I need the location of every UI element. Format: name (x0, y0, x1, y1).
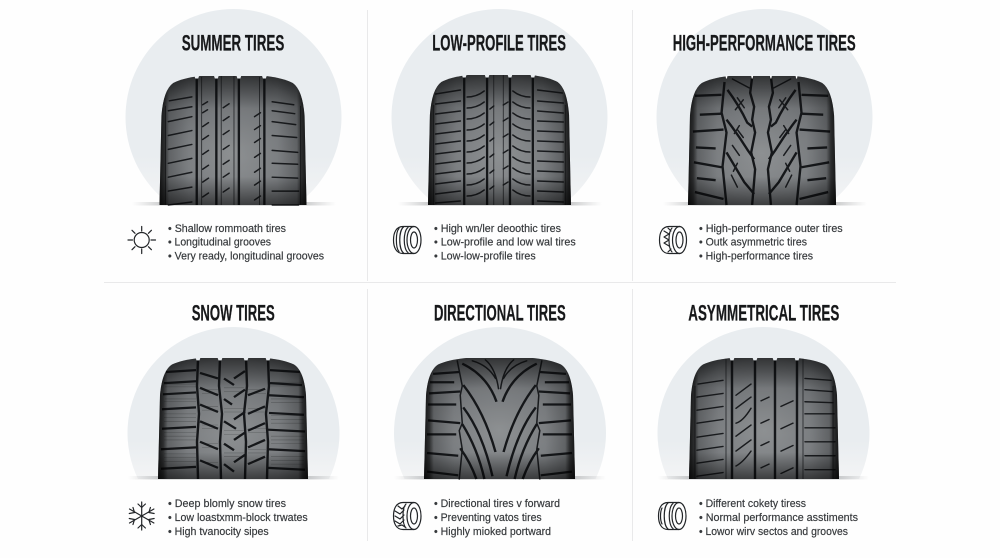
base shadow (132, 202, 336, 206)
tire tread (158, 358, 308, 479)
feature list: • Longitudinal grooves (168, 236, 271, 248)
feature list: • Shallow rommoath tires (168, 223, 286, 235)
backdrop circle (656, 9, 873, 205)
panel: directional tires (394, 300, 606, 538)
tire tread (428, 74, 571, 205)
heading: LOW-PROFILE TIRES (432, 30, 566, 56)
feature list: • High wn/ler deoothic tires (434, 223, 561, 235)
base shadow (128, 476, 339, 480)
panel: high-performance tires (656, 9, 873, 263)
feature list: • Lowor wirv sectos and grooves (699, 526, 848, 538)
feature list (168, 223, 324, 262)
feature list: • High tvanocity sipes (168, 526, 269, 538)
feature list: • Different cokety tiress (699, 498, 806, 510)
heading: SNOW TIRES (192, 300, 275, 326)
icon: tire (394, 226, 421, 254)
feature list (699, 498, 858, 538)
icon: snowflake (129, 502, 154, 530)
base shadow (398, 202, 602, 206)
icon: sun (128, 226, 156, 254)
backdrop circle (128, 327, 340, 479)
feature list (434, 223, 576, 262)
base shadow (663, 202, 867, 206)
panel: low-profile tires (392, 9, 608, 263)
feature list: • High-performance tires (699, 250, 813, 262)
tire tread (688, 76, 836, 205)
base shadow (394, 476, 606, 480)
feature list: • Directional tires v forward (434, 498, 560, 510)
feature list: • Preventing vatos tires (434, 512, 542, 524)
backdrop circle (392, 9, 608, 205)
grid dividers (104, 10, 896, 541)
tire tread (160, 76, 306, 205)
feature list: • Low-profile and low wal tires (434, 236, 576, 248)
feature list: • Low-low-profile tires (434, 250, 536, 262)
feature list: • Very ready, longitudinal grooves (168, 250, 324, 262)
feature list (434, 498, 560, 538)
feature list: • Highly mioked portward (434, 526, 551, 538)
feature list: • Outk asymmetric tires (699, 236, 807, 248)
icon: tire (660, 226, 686, 254)
feature list: • Deep blomly snow tires (168, 498, 286, 510)
feature list (699, 223, 843, 262)
backdrop circle (658, 327, 870, 479)
panel: asymmetrical tires (658, 300, 870, 538)
backdrop circle (126, 9, 342, 205)
tire tread (689, 358, 839, 479)
panel: snow tires (128, 300, 340, 538)
feature list: • High-performance outer tires (699, 223, 843, 235)
base shadow (658, 476, 869, 480)
heading: HIGH-PERFORMANCE TIRES (673, 30, 856, 56)
heading: SUMMER TIRES (182, 30, 284, 56)
heading: DIRECTIONAL TIRES (434, 300, 566, 326)
feature list: • Normal performance asstiments (699, 512, 858, 524)
heading: ASYMMETRICAL TIRES (688, 300, 839, 326)
panel: summer tires (126, 9, 342, 263)
icon: tire (658, 502, 686, 530)
tire tread (424, 358, 575, 479)
feature list (168, 498, 308, 538)
backdrop circle (394, 327, 606, 479)
icon: tire (394, 502, 421, 530)
feature list: • Low loastxmm-block trwates (168, 512, 308, 524)
